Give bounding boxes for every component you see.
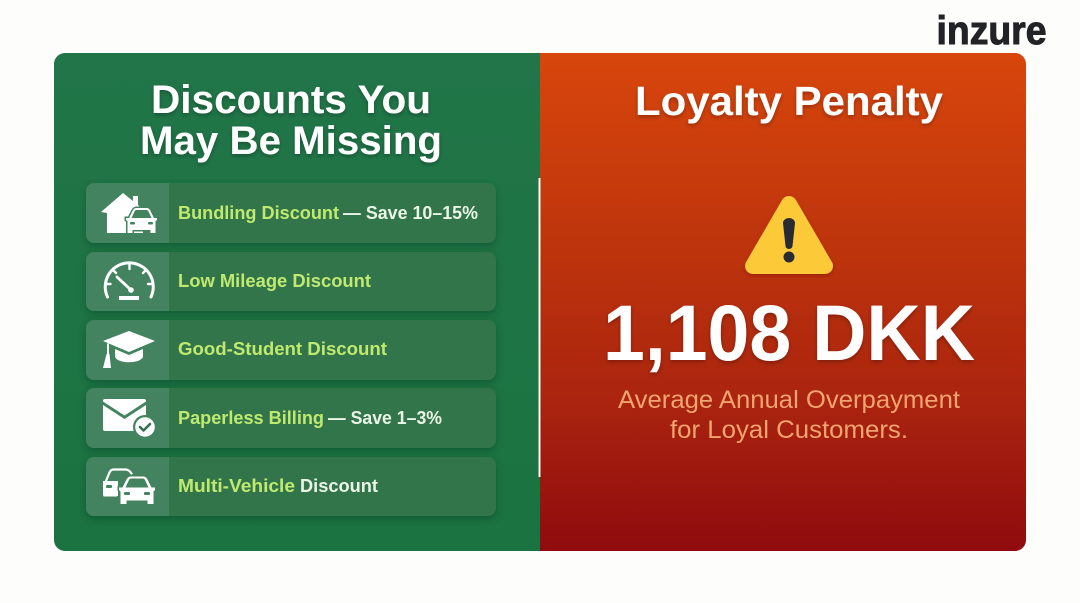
row: low mileage discount [86,252,496,311]
row: paperless billing [86,388,496,448]
divider [538,178,540,477]
text: bundling: — Save 10–15% [343,203,478,223]
text: multi-vehicle: Discount [300,476,378,496]
icon: graduation cap [103,331,155,368]
caption: overpayment: for Loyal Customers. [670,416,908,444]
logo: inzure: inzure [936,9,1046,53]
row: multi-vehicle discount [86,457,496,516]
heading: discounts [140,78,442,163]
icon: envelope with check [103,399,157,439]
row: good-student discount [86,320,496,380]
row: bundling discount [86,183,496,243]
icon: warning triangle [753,204,825,266]
stat: 1,108 DKK: 1,108 DKK [603,288,975,377]
text: paperless: — Save 1–3% [328,408,442,428]
caption: overpayment: Average Annual Overpayment [618,386,960,414]
heading: discounts: Discounts You [151,78,431,122]
heading: discounts: May Be Missing [140,119,442,163]
text: good student: Good-Student Discount [178,339,387,359]
text: multi-vehicle: Multi-Vehicle [178,476,295,496]
icon: house and car [101,193,157,233]
heading: loyalty penalty: Loyalty Penalty [635,78,943,124]
text: low mileage: Low Mileage Discount [178,271,371,291]
caption: overpayment [618,386,960,444]
text: paperless: Paperless Billing [178,408,324,428]
text: bundling: Bundling Discount [178,203,339,223]
icon: two cars [103,470,155,504]
icon: speedometer [105,263,153,300]
panel: background card [54,53,1026,551]
